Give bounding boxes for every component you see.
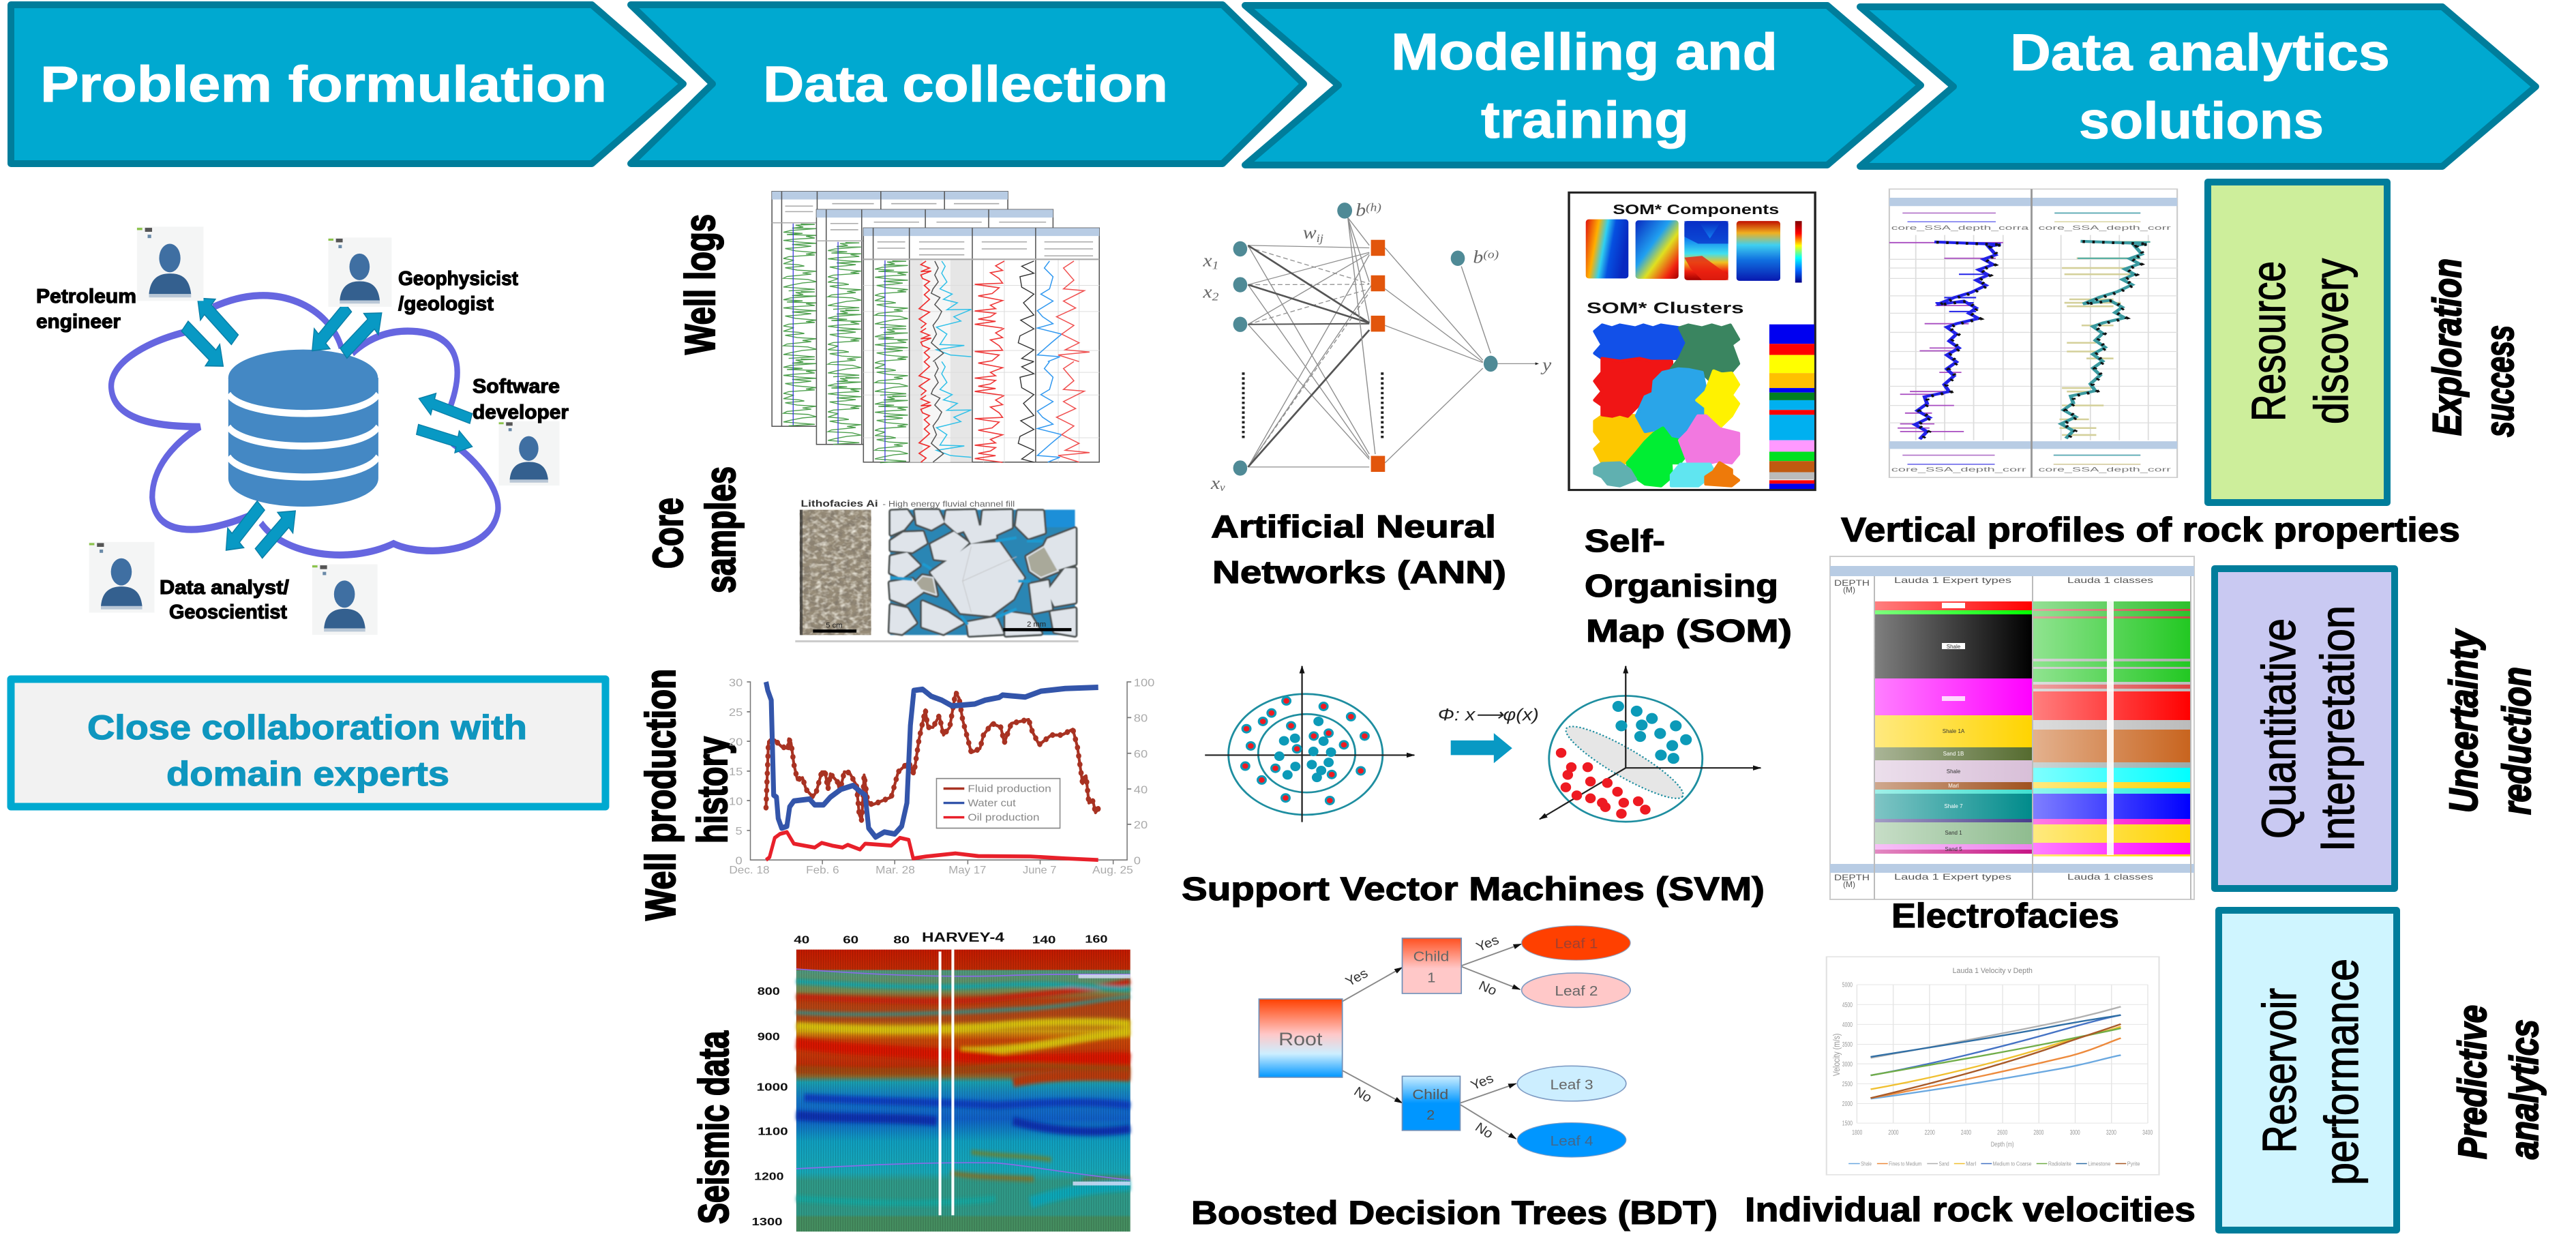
label: Software developer: [473, 376, 569, 423]
child node 2: 2: [1426, 1108, 1435, 1123]
series: fluid production: [766, 692, 1098, 820]
branch labels: [1343, 933, 1501, 1141]
caption: Artificial Neural Networks: [1211, 509, 1506, 590]
expert type bands: [1874, 601, 2033, 854]
seismic axis labels: [752, 929, 1107, 1228]
velocity legend: Marl: [1966, 1161, 1976, 1167]
track headers: core_SSA_depth_corr: [2039, 466, 2171, 473]
caption: lithofacies: - High energy fluvial channel fill: [882, 500, 1015, 509]
axis labels: Feb. 6: [806, 865, 839, 876]
math labels: 2: [1212, 290, 1218, 303]
axis labels: 100: [1134, 678, 1154, 689]
diagram: artificial neural network: [1202, 200, 1552, 494]
electrofacies headers: (M): [1843, 880, 1855, 889]
seismic axis labels: 60: [843, 934, 858, 946]
velocity axis labels: [1831, 981, 2153, 1148]
caption: Self-Organising Map: Self-: [1585, 523, 1665, 558]
SOM component maps: SOM* Components: [1613, 201, 1779, 218]
velocity axis labels: 4000: [1842, 1021, 1853, 1028]
cloud outline: [111, 295, 498, 555]
feature space plot: [1540, 666, 1761, 822]
leaf 4: [1517, 1123, 1626, 1157]
velocity axis labels: 3400: [2142, 1128, 2153, 1136]
scale bar 2 mm: [1003, 620, 1071, 631]
caption: Support Vector Machines: Support Vector Machines (SVM): [1182, 871, 1765, 908]
seismic axis labels: 1100: [758, 1126, 788, 1138]
velocity axis labels: 2000: [1888, 1128, 1899, 1136]
input space plot: [1205, 666, 1414, 822]
label: Geophysicist / geologist: /geologist: [398, 293, 494, 315]
label: Data analyst / Geoscientist: Data analyst/: [160, 577, 289, 599]
outcome: Uncertainty reduction: [2442, 629, 2539, 815]
chevron: Data analytics solutions: [1860, 7, 2536, 166]
outcome: Predictive analytics: analytics: [2502, 1019, 2547, 1159]
child node 1: Child: [1413, 949, 1449, 965]
velocity grid: [1857, 985, 2148, 1123]
label: Data analyst / Geoscientist: Geoscientist: [169, 601, 287, 623]
seismic axis labels: 800: [758, 985, 780, 998]
axis labels: 0: [1134, 856, 1141, 867]
caption: Self-Organising Map: [1585, 523, 1792, 648]
outcome: Exploration success: success: [2478, 325, 2522, 437]
SOM colour key: [1769, 325, 1814, 489]
axes: [747, 682, 1131, 864]
leaf 2: [1522, 973, 1630, 1007]
caption: Boosted Decision Trees: Boosted Decision Trees (BDT): [1191, 1195, 1718, 1231]
axis labels: 25: [729, 707, 743, 719]
seismic axis labels: 1000: [757, 1081, 788, 1094]
outcome: Uncertainty reduction: Uncertainty: [2442, 629, 2486, 813]
label: Geophysicist / geologist: [398, 268, 518, 315]
caption: lithofacies: Lithofacies Ai: [800, 498, 878, 509]
axis labels: 5: [736, 826, 743, 837]
icon: data analyst person: [89, 542, 154, 612]
velocity legend: Limestone: [2088, 1161, 2110, 1167]
velocity axis labels: 2500: [1842, 1080, 1853, 1088]
axis labels: [729, 678, 1154, 876]
input and output nodes: [1233, 203, 1498, 476]
seismic axis labels: 160: [1085, 933, 1107, 946]
tree branches: [1343, 944, 1521, 1139]
SOM cluster map: [1587, 299, 1744, 485]
math labels: v: [1220, 481, 1226, 494]
facies tags: Shale 1A: [1943, 728, 1965, 734]
chart: stacked well log sheets: [772, 192, 1099, 463]
facies tags: Sand 1B: [1943, 751, 1964, 757]
icon: software developer person: [499, 421, 560, 485]
velocity axis labels: 1800: [1852, 1128, 1863, 1136]
velocity legend: Pyrite: [2127, 1161, 2140, 1167]
diagram: support vector machine: [1205, 666, 1761, 822]
velocity axis labels: 5000: [1842, 981, 1853, 989]
facies tags: Marl: [1948, 783, 1959, 789]
track headers: core_SSA_depth_corr: [2039, 225, 2171, 231]
axis labels: 30: [729, 678, 743, 689]
math labels: w: [1303, 223, 1317, 243]
callout: close collaboration: [11, 679, 605, 807]
velocity axis labels: 2200: [1925, 1128, 1935, 1136]
facies tags: Sand 5: [1945, 846, 1962, 852]
velocity legend: Radiolarite: [2048, 1161, 2071, 1167]
axis labels: June 7: [1023, 865, 1056, 876]
label: Software developer: Software: [473, 376, 560, 398]
axis labels: Mar. 28: [875, 865, 915, 876]
leaf 1: Leaf 1: [1555, 936, 1598, 951]
branch labels: No: [1351, 1084, 1375, 1105]
velocity axis labels: 3000: [2070, 1128, 2080, 1136]
heading: Well logs: Well logs: [677, 214, 724, 355]
electrofacies headers: Lauda 1 Expert types: [1894, 872, 2011, 882]
child node 2: [1403, 1076, 1460, 1131]
velocity legend: Medium to Coarse: [1993, 1161, 2032, 1167]
scale bar 2 mm: 2 mm: [1027, 620, 1046, 629]
velocity axis labels: Velocity (m/s): [1831, 1034, 1842, 1076]
label: Geophysicist / geologist: Geophysicist: [398, 268, 518, 290]
icon: exchange arrows: [177, 288, 475, 564]
SOM component maps: [1586, 201, 1802, 282]
velocity axis labels: 4500: [1842, 1001, 1853, 1008]
facies tags: Shale: [1947, 768, 1961, 775]
leaf 3: [1517, 1066, 1626, 1101]
chevron: Problem formulation: Problem formulation: [40, 56, 607, 113]
outcome: Predictive analytics: [2451, 1005, 2547, 1159]
electrofacies headers: [1830, 566, 2194, 889]
branch labels: No: [1476, 978, 1499, 998]
box: Resource discovery: [2208, 182, 2387, 503]
velocity legend: Shale: [1861, 1161, 1872, 1167]
caption: Self-Organising Map: Organising: [1585, 568, 1778, 603]
kernel mapping formula: Φ: x⟶φ(x): [1438, 706, 1539, 724]
axis labels: 60: [1134, 749, 1148, 760]
network connections: [1248, 218, 1538, 467]
icon: petroleum engineer person: [137, 226, 203, 301]
box: Quantitative Interpretation: Quantitative: [2252, 618, 2305, 839]
heading: Core samples: Core: [645, 498, 692, 569]
outcome: Exploration success: [2425, 258, 2522, 437]
chevron: Modelling and training: training: [1481, 91, 1689, 149]
axis labels: 10: [729, 796, 743, 808]
seismic image: [796, 950, 1130, 1231]
label: Petroleum engineer: Petroleum: [36, 286, 136, 308]
diagram: boosted decision tree: [1259, 926, 1630, 1157]
facies tags: [1942, 603, 1965, 852]
box: Quantitative Interpretation: Interpretation: [2311, 605, 2364, 852]
core photo: [800, 510, 871, 635]
math labels: b: [1356, 200, 1366, 220]
heading: Well production history: history: [689, 736, 736, 843]
electrofacies headers: Lauda 1 classes: [2067, 575, 2153, 585]
icon: geophysicist person: [329, 237, 391, 307]
sheet 3: [863, 228, 1099, 463]
core photo: 5 cm: [826, 622, 843, 630]
caption: Vertical profiles: Vertical profiles of rock properties: [1841, 511, 2460, 549]
thin-section micrograph: [890, 510, 1075, 635]
outcome: Uncertainty reduction: reduction: [2495, 667, 2539, 815]
axis labels: 80: [1134, 713, 1148, 725]
hidden nodes: [1371, 240, 1385, 472]
velocity axis labels: 3500: [1842, 1041, 1853, 1049]
legend: Fluid production: [968, 783, 1051, 794]
math labels: x: [1211, 473, 1220, 494]
heading: Seismic data: Seismic data: [691, 1031, 738, 1224]
branch labels: No: [1472, 1120, 1496, 1141]
velocity legend: Sand: [1939, 1161, 1949, 1167]
root node: [1259, 999, 1343, 1077]
math labels: ij: [1317, 233, 1323, 245]
axis labels: 15: [729, 767, 743, 778]
velocity axis labels: 2400: [1961, 1128, 1971, 1136]
electrofacies headers: Lauda 1 classes: [2067, 872, 2153, 882]
caption: Electrofacies: Electrofacies: [1891, 897, 2119, 935]
caption: Self-Organising Map: Map (SOM): [1586, 613, 1792, 648]
legend: [936, 779, 1060, 828]
box: Quantitative Interpretation: [2215, 569, 2395, 888]
facies tags: Sand 1: [1945, 830, 1962, 836]
axis labels: 0: [736, 856, 743, 867]
axis labels: 20: [729, 737, 743, 749]
chart title: Lauda 1 Velocity v Depth: [1953, 966, 2033, 975]
math labels: b: [1473, 248, 1483, 267]
predicted class bands: [2033, 601, 2191, 856]
icon: geoscientist person: [312, 564, 378, 635]
branch labels: Yes: [1343, 966, 1371, 989]
axis labels: 40: [1134, 785, 1148, 796]
well track: [939, 950, 954, 1215]
legend: Water cut: [968, 797, 1016, 809]
box: Resource discovery: discovery: [2305, 258, 2358, 424]
velocity axis labels: 2000: [1842, 1100, 1853, 1108]
callout: close collaboration: Close collaboration with: [87, 708, 527, 747]
icon: database cylinder: [228, 350, 378, 507]
track headers: core_SSA_depth_corra: [1891, 225, 2029, 231]
seismic axis labels: 80: [893, 934, 910, 946]
heading: Well production history: [638, 669, 736, 921]
outcome: Exploration success: Exploration: [2425, 258, 2470, 436]
velocity legend: [1848, 1161, 2140, 1167]
electrofacies headers: Lauda 1 Expert types: [1894, 575, 2011, 585]
box: Reservoir performance: [2219, 910, 2397, 1230]
box: Resource discovery: Resource: [2242, 261, 2295, 421]
box: Reservoir performance: performance: [2315, 959, 2368, 1185]
velocity lines: [1871, 1006, 2121, 1098]
heading: Core samples: samples: [698, 466, 745, 593]
math labels: x: [1203, 251, 1212, 271]
panel: core samples: [795, 498, 1079, 642]
chevron: Data collection: Data collection: [763, 56, 1168, 113]
seismic axis labels: 900: [758, 1031, 780, 1043]
seismic axis labels: 140: [1032, 934, 1055, 946]
axis labels: Dec. 18: [729, 865, 770, 876]
seismic axis labels: 1200: [754, 1171, 783, 1183]
arrow: mapping: [1451, 733, 1512, 763]
electrofacies headers: DEPTH: [1834, 578, 1870, 588]
leaf 4: Leaf 4: [1550, 1133, 1593, 1149]
series: oil production: [766, 832, 1098, 860]
velocity axis labels: 2600: [1997, 1128, 2007, 1136]
leaf 2: Leaf 2: [1555, 984, 1598, 999]
seismic axis labels: HARVEY-4: [922, 929, 1005, 944]
branch labels: Yes: [1474, 933, 1501, 955]
label: Data analyst / Geoscientist: [160, 577, 289, 623]
electrofacies headers: (M): [1843, 585, 1855, 595]
label: Software developer: developer: [473, 402, 569, 423]
axis labels: 20: [1134, 820, 1148, 831]
caption: lithofacies: [800, 498, 1015, 509]
seismic axis labels: 40: [794, 934, 809, 946]
math labels: [1202, 200, 1552, 494]
legend: Oil production: [968, 811, 1039, 823]
velocity legend: Fines to Medium: [1889, 1161, 1921, 1167]
leaf 3: Leaf 3: [1550, 1077, 1593, 1093]
track headers: core_SSA_depth_corr: [1891, 466, 2026, 473]
sheet 1: [772, 192, 1008, 426]
series: water cut: [766, 682, 1098, 837]
child node 1: [1403, 938, 1461, 993]
electrofacies headers: DEPTH: [1834, 873, 1870, 882]
outcome: Predictive analytics: Predictive: [2451, 1005, 2495, 1159]
facies tags: Shale 7: [1944, 803, 1963, 809]
chevron: Modelling and training: Modelling and: [1391, 23, 1778, 81]
seismic axis labels: 1300: [752, 1216, 782, 1228]
caption: Individual rock velocities: Individual rock velocities: [1745, 1191, 2196, 1229]
callout: close collaboration: domain experts: [166, 755, 449, 793]
velocity axis labels: 1500: [1842, 1120, 1853, 1127]
box: Reservoir performance: Reservoir: [2253, 988, 2306, 1153]
chart: well production history: [729, 678, 1154, 876]
velocity axis labels: 3200: [2106, 1128, 2116, 1136]
math labels: y: [1540, 355, 1552, 375]
branch labels: Yes: [1469, 1071, 1496, 1093]
velocity axis labels: 2800: [2033, 1128, 2044, 1136]
SOM cluster map: SOM* Clusters: [1587, 299, 1744, 317]
caption: Artificial Neural Networks: Artificial Neural: [1211, 509, 1496, 544]
label: Petroleum engineer: [36, 286, 136, 333]
chevron: Data collection: [631, 5, 1304, 164]
facies tags: Shale: [1947, 644, 1961, 650]
child node 2: Child: [1412, 1088, 1448, 1103]
panel: collaboration diagram: [89, 226, 560, 635]
velocity axis labels: Depth (m): [1991, 1140, 2014, 1148]
math labels: (o): [1483, 248, 1499, 261]
chart: electrofacies: [1830, 556, 2194, 899]
right track: SVM and BDT: [2059, 241, 2151, 439]
heading: Core samples: [645, 466, 745, 593]
heading: Well production history: Well production: [638, 669, 685, 921]
chevron: Data analytics solutions: Data analytics: [2010, 24, 2390, 82]
track headers: [1889, 198, 2177, 473]
profile grid: [1889, 235, 2177, 440]
left track: MLR and MLP: [1889, 242, 2003, 440]
axis labels: May 17: [948, 865, 986, 876]
sheet 2: [816, 209, 1053, 445]
axis labels: Aug. 25: [1092, 865, 1133, 876]
root node: Root: [1278, 1029, 1323, 1049]
velocity axis labels: 3000: [1842, 1060, 1853, 1068]
chart: individual rock velocities: [1827, 957, 2159, 1175]
chart: seismic section: [752, 929, 1130, 1231]
child node 1: 1: [1427, 970, 1435, 985]
chevron: Problem formulation: [11, 5, 683, 164]
math labels: 1: [1212, 259, 1218, 271]
diagram: self-organising map: [1569, 192, 1815, 490]
caption: Artificial Neural Networks: Networks (ANN): [1212, 554, 1506, 590]
label: Petroleum engineer: engineer: [36, 311, 121, 333]
math labels: x: [1203, 282, 1212, 302]
chevron: Modelling and training: [1245, 5, 1921, 165]
math labels: (h): [1366, 200, 1381, 214]
chevron: Data analytics solutions: solutions: [2079, 92, 2324, 150]
chart: vertical profiles of rock properties: [1889, 189, 2177, 477]
leaf 1: [1522, 926, 1630, 960]
